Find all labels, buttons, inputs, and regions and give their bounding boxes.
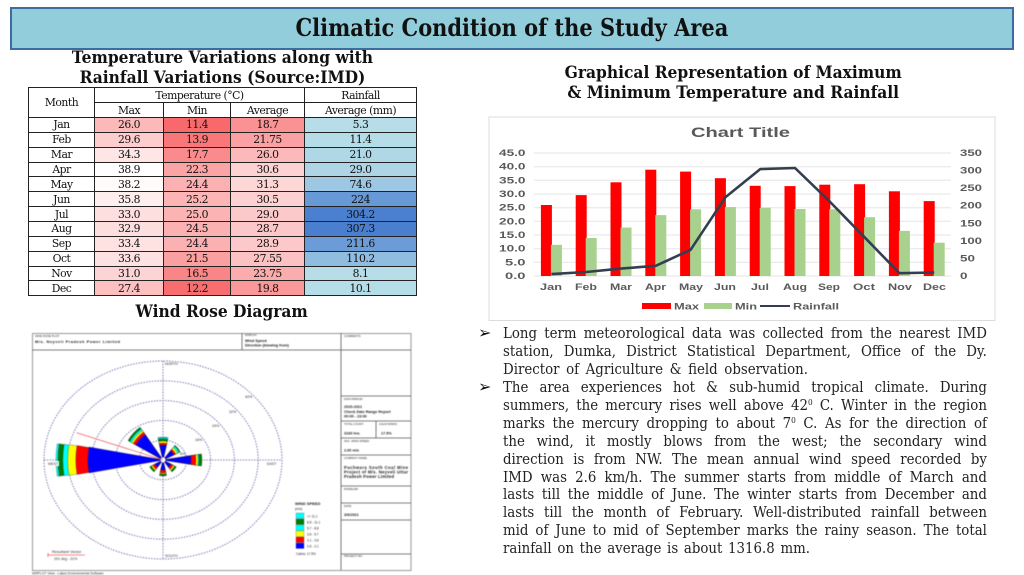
rose info column: 3160 hrs. (344, 432, 360, 436)
month labels: Apr (645, 282, 667, 292)
wedge: north-east (160, 445, 181, 463)
rose header text: Wind Speed (245, 339, 267, 343)
rose header text: DISPLAY: (245, 333, 257, 337)
month labels: Nov (888, 282, 912, 292)
text block: climate description: summers, the mercury rises well above 420 C. Winter in the region (503, 398, 987, 414)
table: temperature and rainfall: 110.2 (346, 252, 375, 265)
wind speed legend: 0.5 - 2.1 (307, 544, 319, 548)
rose info column: DATE: (344, 504, 352, 508)
title banner (10, 7, 1014, 50)
table: temperature and rainfall: 307.3 (346, 222, 375, 235)
rose info column: 17.5% (381, 432, 392, 436)
wind speed legend: WIND SPEED (295, 501, 320, 506)
text block: climate description: the wind, it mostly blows from the west; the secondary wind (503, 434, 987, 450)
table: temperature and rainfall: 26.0 (118, 118, 140, 131)
wedge: south-west (149, 457, 165, 472)
wind speed legend (295, 501, 320, 556)
text block: climate description: station, Dumka, District Statistical Department, Office of the Dy. (503, 344, 987, 360)
rose info column: COMPANY NAME: (344, 456, 368, 460)
table: temperature and rainfall: 5.3 (353, 118, 368, 131)
table: temperature and rainfall: 34.3 (118, 148, 140, 161)
month labels: Jun (714, 282, 736, 292)
table: temperature and rainfall: 211.6 (346, 237, 375, 250)
table: temperature and rainfall: 22.3 (186, 163, 208, 176)
table: temperature and rainfall: 11.4 (186, 118, 208, 131)
resultant vector (48, 433, 163, 557)
table: temperature and rainfall: Oct (53, 252, 70, 265)
wind speed legend: (m/s) (295, 507, 302, 511)
table: temperature and rainfall: 16.5 (186, 267, 208, 280)
table: temperature and rainfall: 28.7 (256, 222, 279, 235)
table: temperature and rainfall: 21.0 (349, 148, 372, 161)
table: temperature and rainfall: 8.1 (353, 267, 368, 280)
wedge: south (159, 460, 167, 476)
rose direction labels: 8% (180, 452, 186, 456)
rose info column: Pachwara South Coal Mine (344, 465, 409, 470)
text block: climate description: mid of June to mid of September marks the rainy season. The total (503, 523, 987, 539)
table: temperature and rainfall: 27.4 (118, 282, 140, 295)
heading: chart: & Minimum Temperature and Rainfall (567, 83, 899, 103)
table: temperature and rainfall: Apr (52, 163, 71, 176)
table: temperature and rainfall: 29.0 (349, 163, 372, 176)
rose direction labels: EAST (267, 462, 277, 466)
heading: chart: Graphical Representation of Maximum (564, 63, 902, 83)
rose direction labels: WEST (48, 462, 59, 466)
table: temperature and rainfall: 24.5 (186, 222, 208, 235)
wind speed legend: 5.7 - 8.8 (307, 526, 319, 530)
text block: climate description: lasts till the middle of June. The winter starts from December and (503, 487, 987, 503)
right axis labels: 250 (960, 183, 982, 193)
heading: temperature table: Rainfall Variations (Source:IMD) (79, 68, 365, 88)
rose header text: WIND ROSE PLOT: (35, 334, 60, 338)
left axis labels: 40.0 (499, 162, 526, 172)
chart legend: Max (674, 302, 699, 312)
table: temperature and rainfall: 31.0 (118, 267, 140, 280)
month labels: Aug (783, 282, 807, 292)
wedge: north (158, 437, 168, 460)
table: temperature and rainfall: 19.8 (256, 282, 279, 295)
table: temperature and rainfall: 30.5 (256, 193, 279, 206)
title banner: Climatic Condition of the Study Area (296, 13, 728, 42)
table: temperature and rainfall: Average (mm) (325, 104, 396, 116)
month labels: Feb (575, 282, 598, 292)
rose info column: AVG. WIND SPEED: (344, 439, 370, 443)
text block: climate description: marks the mercury dropping to about 70 C. As for the direction of (503, 416, 987, 432)
rose info column: PROJECT NO.: (344, 554, 364, 558)
chart legend: Min (735, 302, 757, 312)
month labels: Oct (853, 282, 875, 292)
left axis labels: 0.0 (505, 271, 526, 281)
table: temperature and rainfall: 25.2 (186, 193, 208, 206)
right axis labels: 200 (960, 201, 982, 211)
table: temperature and rainfall: 21.75 (253, 133, 282, 146)
rose header text (35, 333, 361, 348)
rose info column: Pradesh Power Limited (344, 474, 394, 479)
table: temperature and rainfall: Feb (52, 133, 71, 146)
wedge: east (163, 454, 202, 466)
rose direction labels: 16% (195, 438, 203, 442)
left axis labels: 5.0 (505, 257, 526, 267)
rose direction labels: SOUTH (165, 554, 178, 558)
table: temperature and rainfall: 13.9 (186, 133, 208, 146)
month labels: Jan (540, 282, 562, 292)
text block: climate description: Long term meteorological data was collected from the nearest IMD (503, 326, 987, 342)
left axis labels: 10.0 (499, 244, 526, 254)
right axis labels (960, 148, 982, 281)
table: temperature and rainfall: 11.4 (349, 133, 372, 146)
rose info column: 00:00 - 23:00 (344, 414, 367, 418)
heading: temperature table: Temperature Variations along with (71, 48, 373, 68)
table: temperature and rainfall: 33.0 (118, 208, 140, 221)
table: temperature and rainfall: 27.55 (253, 252, 282, 265)
max temperature bars (541, 170, 935, 276)
rose direction labels (32, 362, 278, 575)
left axis labels: 20.0 (499, 216, 526, 226)
rose info column: 2.60 m/s (344, 448, 359, 452)
table: temperature and rainfall: Min (187, 104, 207, 116)
table: temperature and rainfall: 74.6 (349, 178, 372, 191)
wedge: west (56, 444, 163, 476)
month labels: Mar (610, 282, 633, 292)
min temperature bars (551, 207, 945, 276)
rose direction labels: Resultant Vector (52, 549, 82, 554)
left axis labels: 45.0 (499, 148, 526, 158)
right axis labels: 100 (960, 236, 982, 246)
table: temperature and rainfall: Max (118, 104, 140, 116)
wind speed legend: 8.8 - 11.1 (307, 520, 320, 524)
rose info column: CALM WINDS: (379, 422, 398, 426)
wind speed legend: 3.6 - 5.7 (307, 532, 319, 536)
table: temperature and rainfall: 30.6 (256, 163, 279, 176)
text block: climate description: rainfall on the average is about 1316.8 mm. (503, 541, 810, 557)
text block: climate description: The area experiences hot & sub-humid tropical climate. During (503, 380, 987, 396)
chart legend (642, 302, 839, 312)
table: temperature and rainfall: 33.6 (118, 252, 140, 265)
table: temperature and rainfall: Temperature (°C) (155, 88, 244, 102)
table: temperature and rainfall: Average (247, 104, 288, 116)
text block: climate description: direction is from NW. The mean annual wind speed recorded by (503, 452, 987, 468)
wind speed legend: 2.1 - 3.6 (307, 538, 319, 542)
table: temperature and rainfall: Jun (53, 193, 70, 206)
table: temperature and rainfall: 24.4 (186, 178, 208, 191)
right axis labels: 0 (960, 271, 968, 281)
right axis labels: 50 (960, 253, 975, 263)
rose direction labels: 291 deg - 31% (54, 557, 78, 561)
table: temperature and rainfall: 28.9 (256, 237, 279, 250)
table: temperature and rainfall: 12.2 (186, 282, 208, 295)
rose header text: COMMENTS: (344, 334, 361, 338)
table: temperature and rainfall: 18.7 (256, 118, 279, 131)
table: temperature and rainfall: 32.9 (118, 222, 140, 235)
rose info column: MODELER: (344, 487, 359, 491)
month labels: Jul (751, 282, 769, 292)
rose rings and axes (44, 361, 282, 559)
heading: chart (564, 63, 902, 103)
table: temperature and rainfall: 33.4 (118, 237, 140, 250)
rainfall line (551, 168, 934, 274)
left axis labels: 15.0 (499, 230, 526, 240)
rose info column: DATA PERIOD: (344, 397, 363, 401)
left axis labels (499, 148, 526, 281)
table: temperature and rainfall: 224 (351, 193, 370, 206)
text block: climate description: lasts till the month of February. Well-distributed rainfall between (503, 505, 987, 521)
table: temperature and rainfall: Jul (55, 208, 68, 221)
month labels: Sep (818, 282, 841, 292)
table: temperature and rainfall: 23.75 (253, 267, 282, 280)
table: temperature and rainfall (28, 87, 417, 296)
month labels: May (679, 282, 703, 292)
table: temperature and rainfall: May (50, 178, 73, 191)
left axis labels: 25.0 (499, 203, 526, 213)
table: temperature and rainfall: 26.0 (256, 148, 279, 161)
table: temperature and rainfall: Aug (51, 222, 72, 235)
table: temperature and rainfall: Nov (51, 267, 72, 280)
rose direction labels: 32% (229, 410, 237, 414)
wind speed legend: Calms: 17.5% (296, 552, 316, 556)
rose info column: Check Date Range Report (344, 410, 391, 414)
text block: climate description: IMD was 2.6 km/h. The summer starts from middle of March and (503, 470, 987, 486)
wind speed legend: >= 11.1 (307, 514, 318, 518)
table: temperature and rainfall: 29.6 (118, 133, 140, 146)
rose header text: M/s. Neyveli Pradesh Power Limited (35, 339, 121, 344)
rose info column: 2020-2021 (344, 405, 362, 409)
text block: climate description (503, 326, 988, 557)
table: temperature and rainfall: 38.9 (118, 163, 140, 176)
table: temperature and rainfall: 304.2 (346, 208, 375, 221)
right axis labels: 350 (960, 148, 982, 158)
table: temperature and rainfall: Dec (52, 282, 71, 295)
month labels: Dec (923, 282, 946, 292)
rose direction labels: NORTH (165, 362, 178, 366)
bullet icon 1: ➢ (478, 323, 491, 342)
left axis labels: 30.0 (499, 189, 526, 199)
wedge: south-east (161, 457, 177, 472)
rose info column: TOTAL COUNT: (344, 422, 364, 426)
table: temperature and rainfall: 29.0 (256, 208, 279, 221)
right axis labels: 300 (960, 166, 982, 176)
table: temperature and rainfall: 21.5 (186, 252, 208, 265)
table: temperature and rainfall: Rainfall (341, 88, 380, 102)
rose direction labels: 40% (245, 395, 253, 399)
table: temperature and rainfall: 10.1 (349, 282, 372, 295)
table: temperature and rainfall: 24.4 (186, 237, 208, 250)
chart title: Chart Title (691, 124, 790, 140)
rose header text: Direction (blowing from) (245, 344, 290, 348)
table: temperature and rainfall: 38.2 (118, 178, 140, 191)
table: temperature and rainfall: Month (45, 96, 78, 109)
chart legend: Rainfall (793, 302, 839, 312)
heading: wind rose: Wind Rose Diagram (136, 302, 308, 322)
rose info column: 3/9/2021 (344, 513, 359, 517)
wedge: north-west (127, 427, 169, 467)
table: temperature and rainfall: 35.8 (118, 193, 140, 206)
table: temperature and rainfall: Jan (53, 118, 70, 131)
table: temperature and rainfall: Mar (51, 148, 72, 161)
bullet icon 2: ➢ (478, 377, 491, 396)
table: temperature and rainfall: 17.7 (186, 148, 208, 161)
right axis labels: 150 (960, 218, 982, 228)
month labels (540, 282, 946, 292)
table: temperature and rainfall: 25.0 (186, 208, 208, 221)
left axis labels: 35.0 (499, 175, 526, 185)
heading: temperature table (71, 48, 373, 88)
rose info column: Project of M/s. Neyveli Uttar (344, 470, 408, 474)
rose info column (344, 397, 409, 558)
table: temperature and rainfall: Sep (52, 237, 71, 250)
rose direction labels: 24% (212, 424, 220, 428)
table: temperature and rainfall: 31.3 (256, 178, 279, 191)
text block: climate description: Director of Agriculture & field observation. (503, 362, 808, 378)
